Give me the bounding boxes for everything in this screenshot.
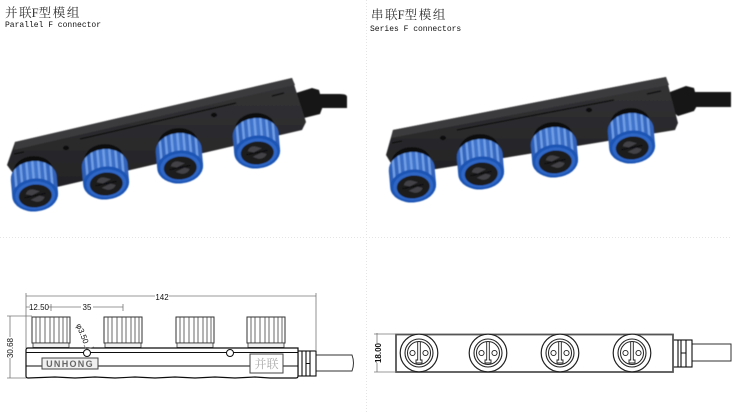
dimension labels: 30.68 (6, 337, 15, 358)
side-view technical drawing (6, 293, 354, 378)
heading: series F connectors (370, 7, 461, 34)
front-view technical drawing (373, 333, 731, 372)
housing (396, 334, 673, 372)
dimension labels: φ3.50 (74, 322, 90, 346)
dimension labels: 35 (83, 303, 92, 312)
cap drawings (32, 317, 285, 348)
connector body (386, 77, 678, 170)
dimension labels: 142 (155, 293, 169, 302)
housing (26, 348, 298, 378)
socket faces (400, 334, 651, 372)
heading: parallel F connector (5, 5, 101, 30)
heading: series F connectors: Series F connectors (370, 25, 461, 34)
connector body (7, 78, 306, 187)
height dimension (373, 333, 396, 372)
cable and gland (294, 88, 347, 118)
heading: series F connectors: 串 联F型 模 组 (371, 7, 446, 22)
heading: parallel F connector: 并 联F型 模 组 (5, 5, 80, 20)
UNHONG label plate: UNHONG (46, 359, 94, 369)
parallel label plate: 并联 (254, 357, 279, 371)
connector caps (387, 106, 657, 204)
dimension labels: 12.50 (29, 303, 50, 312)
cable outline (692, 344, 731, 361)
hole left (84, 350, 90, 356)
gland (298, 351, 316, 376)
dimension labels (6, 293, 169, 358)
photo: series F connector (386, 77, 731, 204)
hole right (226, 350, 234, 356)
heading: parallel F connector: Parallel F connector (5, 21, 101, 30)
cable and gland (668, 86, 731, 116)
photo: parallel F connector (7, 78, 347, 213)
body top facet and slots (391, 77, 669, 143)
cable outline (316, 355, 354, 371)
body top facet and slots (14, 78, 295, 154)
connector caps (9, 111, 282, 213)
dimension lines (7, 293, 316, 378)
gland (673, 340, 692, 367)
height dimension: 18.00 (374, 342, 383, 363)
parallel label plate (250, 354, 283, 373)
